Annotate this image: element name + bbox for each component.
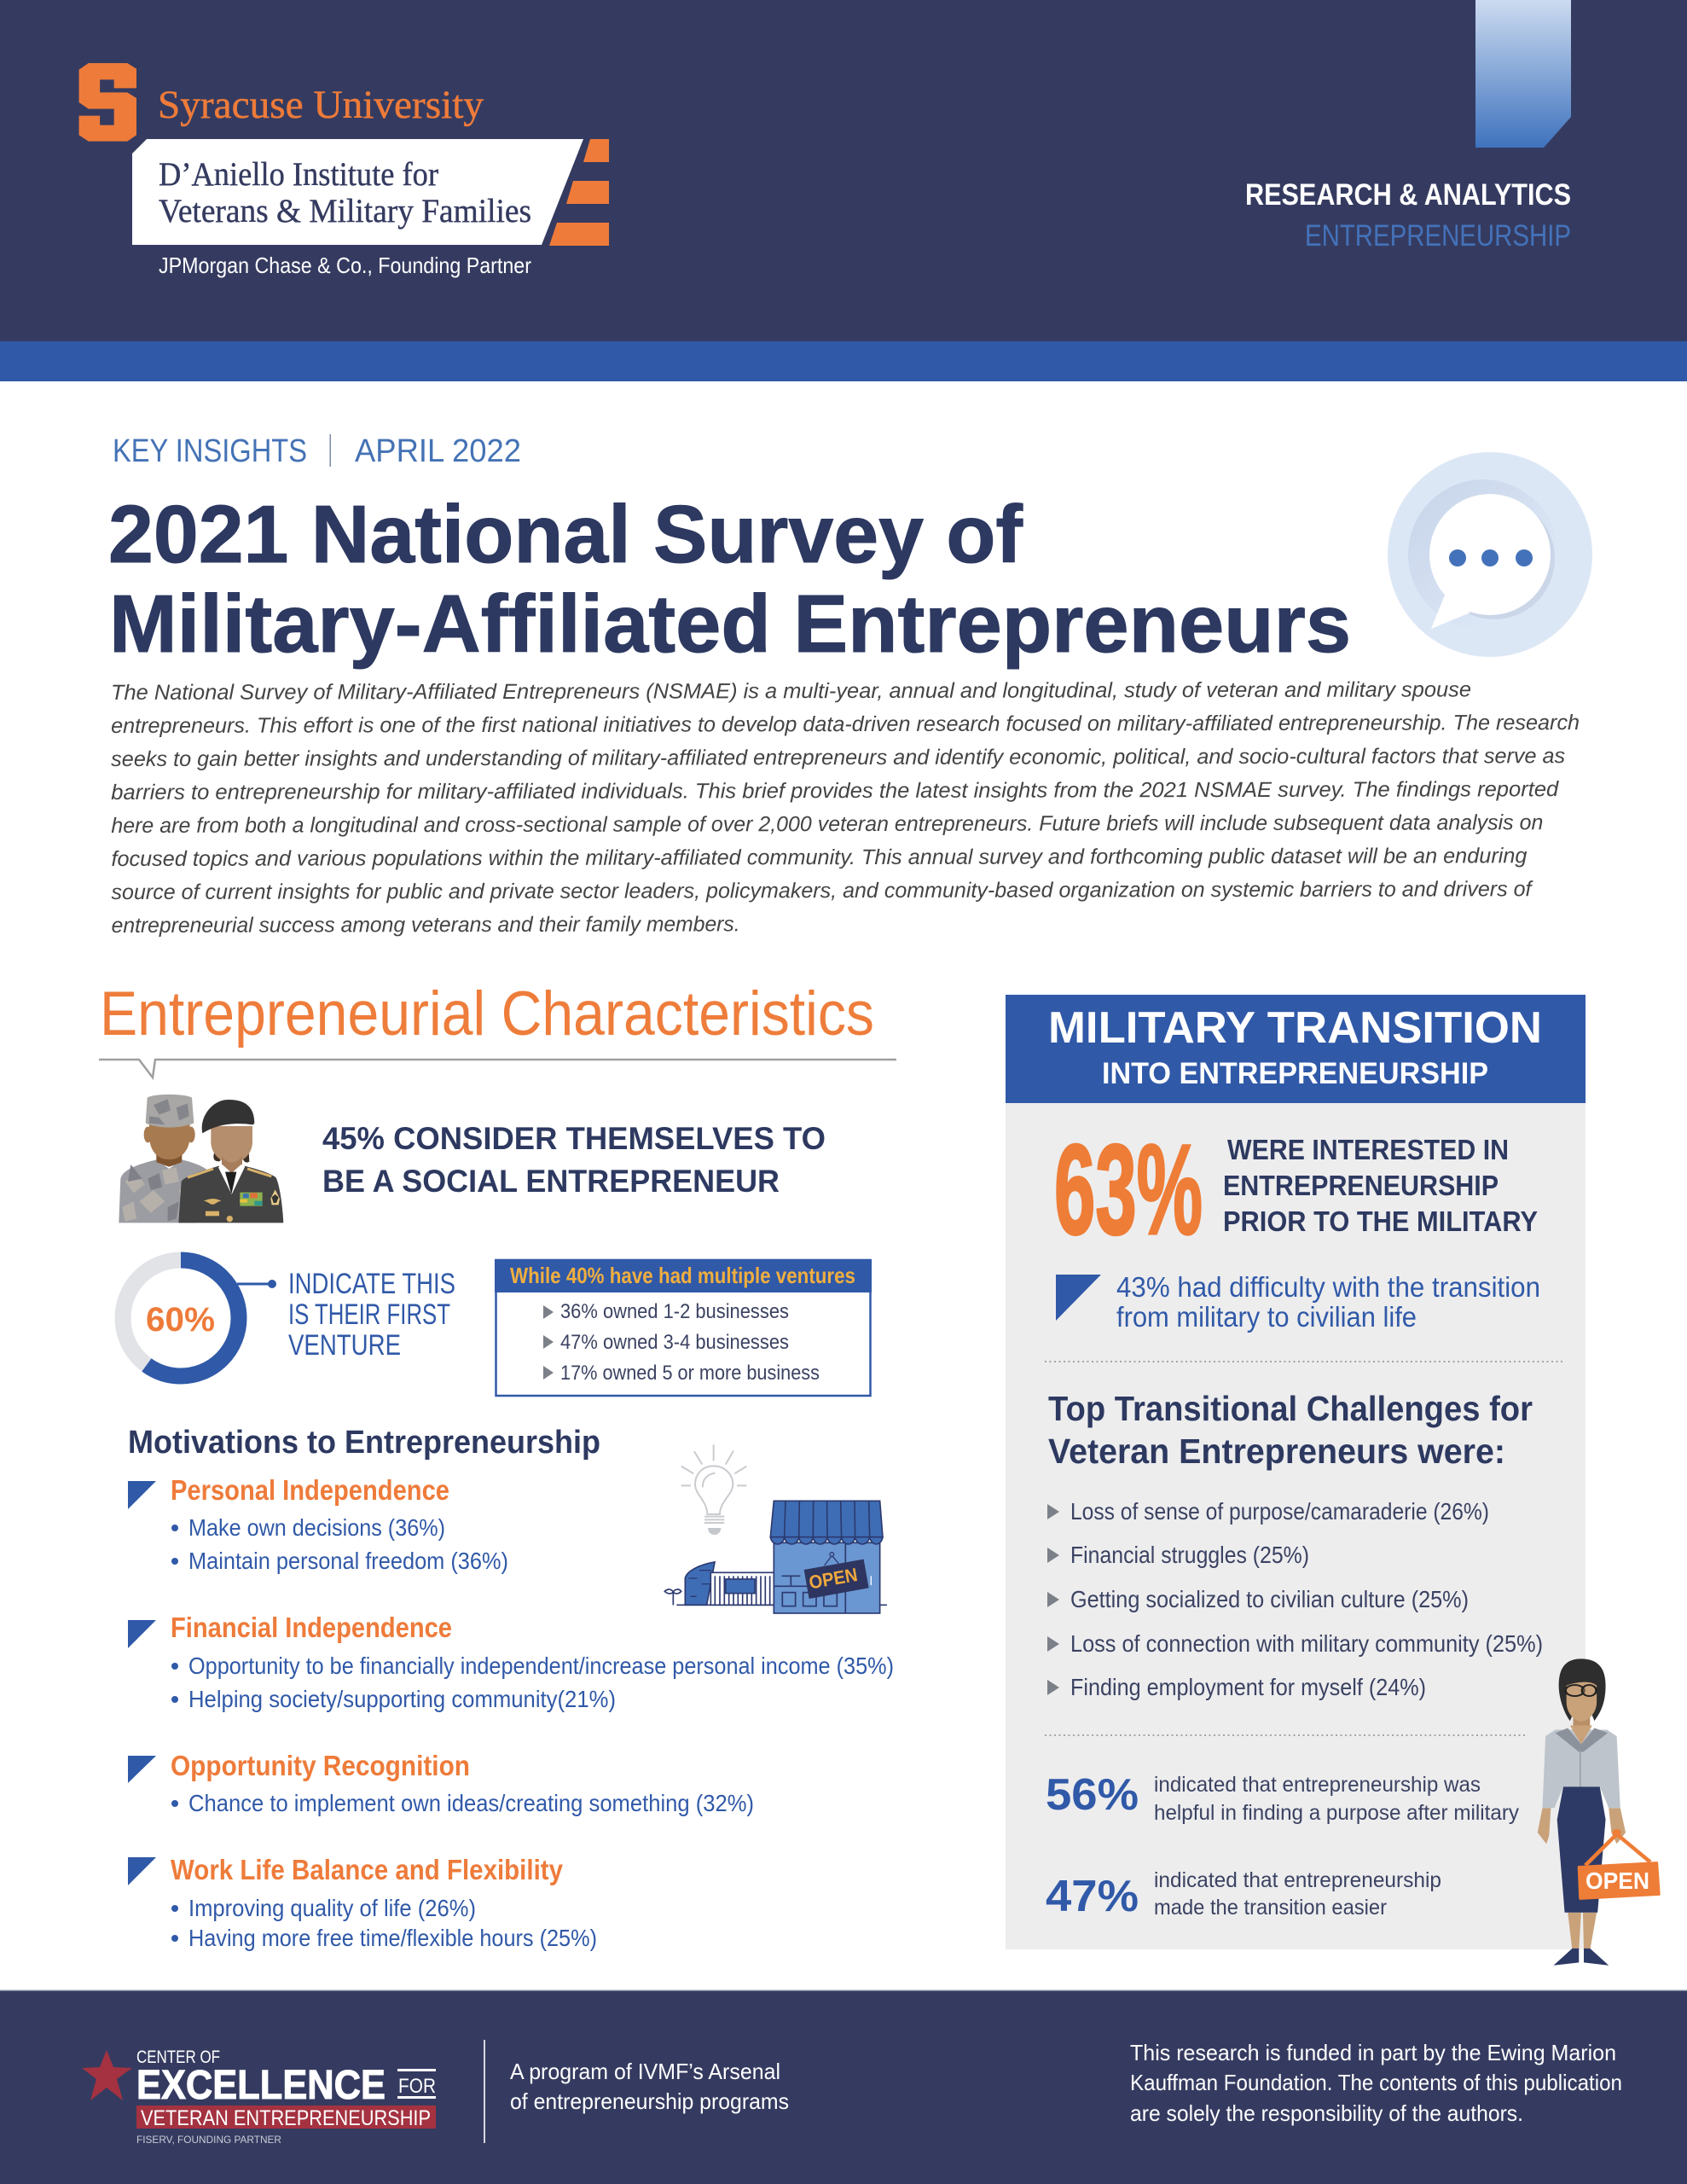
- motivation: personal independence: Maintain personal freedom (36%): [188, 1548, 508, 1574]
- first venture label: INDICATE THIS: [288, 1268, 455, 1300]
- key insights date line: APRIL 2022: [355, 433, 521, 469]
- panel background: [1006, 1103, 1586, 1949]
- icon: woman holding open sign: OPEN: [1586, 1867, 1649, 1894]
- multiple ventures box: 17% owned 5 or more business: [560, 1362, 820, 1385]
- stat: 47 percent: made the transition easier: [1154, 1896, 1387, 1920]
- center of excellence logo: [136, 2048, 436, 2146]
- icon: red star: [82, 2050, 132, 2100]
- institute logo box: Veterans & Military Families: [159, 193, 531, 229]
- stat description: ENTREPRENEURSHIP: [1223, 1170, 1499, 1201]
- icon: store front with open sign: [664, 1501, 887, 1613]
- header background: [0, 0, 1687, 341]
- funding statement: [1130, 2040, 1622, 2126]
- intro paragraph: entrepreneurial success among veterans and their family members.: [112, 912, 740, 938]
- center of excellence logo: VETERAN ENTREPRENEURSHIP: [141, 2106, 431, 2130]
- challenges heading: Veteran Entrepreneurs were:: [1048, 1432, 1505, 1471]
- arsenal program note: [510, 2059, 789, 2114]
- callout: 43 percent: from military to civilian life: [1116, 1301, 1417, 1333]
- motivation: personal independence: Personal Independence: [171, 1474, 449, 1506]
- icon: woman holding open sign: [1538, 1658, 1659, 1966]
- founding partner line: JPMorgan Chase & Co., Founding Partner: [159, 253, 531, 278]
- icon: light bulb: [681, 1444, 746, 1535]
- challenges list: Finding employment for myself (24%): [1070, 1674, 1426, 1700]
- first venture label: [288, 1268, 455, 1362]
- intro paragraph: focused topics and various populations within the military-affiliated community. This annual survey and forthcoming public dataset will be an enduring: [111, 844, 1528, 871]
- icon: two soldiers: [119, 1095, 283, 1223]
- challenges list: Financial struggles (25%): [1070, 1542, 1309, 1568]
- intro paragraph: [111, 677, 1580, 938]
- footer background: [0, 1990, 1687, 2184]
- stat: 56 percent: helpful in finding a purpose after military: [1154, 1801, 1519, 1825]
- intro paragraph: entrepreneurs. This effort is one of the first national initiatives to develop data-driven research focused on military-affiliated entrepreneurship. The research: [111, 711, 1580, 738]
- multiple ventures box: While 40% have had multiple ventures: [510, 1263, 855, 1288]
- stat: 47 percent: 47%: [1046, 1872, 1139, 1921]
- stat: 56 percent: [1046, 1770, 1519, 1825]
- motivation: financial independence: Opportunity to be financially independent/increase personal income (35%): [188, 1653, 894, 1679]
- challenges heading: Top Transitional Challenges for: [1048, 1389, 1533, 1428]
- motivation: work life balance: Improving quality of life (26%): [188, 1895, 476, 1921]
- icon: block S logo: [79, 63, 136, 142]
- statement: social entrepreneur: 45% CONSIDER THEMSELVES TO: [322, 1121, 826, 1156]
- statement: social entrepreneur: [322, 1121, 826, 1199]
- callout: 43 percent: [1056, 1271, 1540, 1333]
- panel: entrepreneurial characteristics: [99, 979, 896, 1951]
- motivation: opportunity recognition: [128, 1750, 754, 1816]
- icon: store front with open sign: OPEN: [808, 1564, 859, 1594]
- intro paragraph: The National Survey of Military-Affiliated Entrepreneurs (NSMAE) is a multi-year, annual and longitudinal, study of veteran and military spouse: [111, 677, 1471, 705]
- motivations heading: Motivations to Entrepreneurship: [128, 1425, 600, 1461]
- stat description: PRIOR TO THE MILITARY: [1223, 1205, 1538, 1237]
- panel: header: [0, 0, 1687, 381]
- heading underline with speech notch: [99, 1060, 896, 1077]
- motivation: opportunity recognition: Opportunity Recognition: [171, 1750, 470, 1781]
- arsenal program note: A program of IVMF’s Arsenal: [510, 2059, 780, 2084]
- institute logo box: D’Aniello Institute for: [159, 156, 438, 193]
- entrepreneurship label: ENTREPRENEURSHIP: [1305, 219, 1571, 253]
- institute logo box: [132, 139, 609, 246]
- challenges list: Loss of connection with military community (25%): [1070, 1630, 1543, 1657]
- section heading: Entrepreneurial Characteristics: [100, 979, 874, 1048]
- multiple ventures box: [495, 1259, 872, 1396]
- funding statement: are solely the responsibility of the authors.: [1130, 2100, 1523, 2126]
- motivation: personal independence: [128, 1474, 508, 1574]
- blue band: [0, 341, 1687, 381]
- funding statement: This research is funded in part by the Ewing Marion: [1130, 2040, 1616, 2065]
- panel: military transition: [1006, 995, 1586, 1949]
- motivation: personal independence: Make own decisions (36%): [188, 1514, 445, 1541]
- first venture label: IS THEIR FIRST: [288, 1298, 450, 1331]
- motivation: work life balance: Work Life Balance and Flexibility: [171, 1854, 564, 1885]
- challenges heading: [1048, 1389, 1533, 1471]
- icon: speech bubble: [1388, 452, 1592, 657]
- title: [108, 489, 1351, 670]
- motivation: financial independence: Financial Independence: [171, 1612, 452, 1643]
- stat description: WERE INTERESTED IN: [1227, 1134, 1509, 1165]
- multiple ventures box: 36% owned 1-2 businesses: [560, 1300, 789, 1323]
- intro paragraph: barriers to entrepreneurship for military-affiliated individuals. This brief provides the latest insights from the 2021 NSMAE survey. The findings reported: [111, 777, 1559, 804]
- callout: 43 percent: 43% had difficulty with the transition: [1116, 1271, 1540, 1303]
- panel: footer: [0, 1989, 1687, 2184]
- motivation: opportunity recognition: Chance to implement own ideas/creating something (32%): [188, 1790, 754, 1816]
- center of excellence logo: FISERV, FOUNDING PARTNER: [136, 2134, 281, 2146]
- research and analytics label: RESEARCH & ANALYTICS: [1245, 178, 1571, 212]
- center of excellence logo: CENTER OF: [136, 2048, 220, 2067]
- stat: 47 percent: indicated that entrepreneurship: [1154, 1868, 1441, 1892]
- stat description: [1223, 1134, 1538, 1237]
- stat: 56 percent: indicated that entrepreneurship was: [1154, 1773, 1481, 1797]
- motivation: financial independence: [128, 1612, 894, 1712]
- statement: social entrepreneur: BE A SOCIAL ENTREPRENEUR: [322, 1164, 780, 1199]
- funding statement: Kauffman Foundation. The contents of this publication: [1130, 2070, 1622, 2095]
- donut chart: 60 percent: [123, 1260, 276, 1376]
- motivation: work life balance: Having more free time/flexible hours (25%): [188, 1925, 597, 1951]
- big stat: 63 percent: 63%: [1054, 1118, 1203, 1261]
- intro paragraph: seeks to gain better insights and understanding of military-affiliated entrepreneurs and identify economic, political, and socio-cultural factors that serve as: [111, 744, 1565, 771]
- center of excellence logo: EXCELLENCE: [136, 2063, 386, 2108]
- intro paragraph: here are from both a longitudinal and cross-sectional sample of over 2,000 veteran entrepreneurs. Future briefs will include subsequent data analysis on: [111, 810, 1543, 838]
- key insights date line: KEY INSIGHTS: [113, 433, 307, 469]
- stat: 56 percent: 56%: [1046, 1770, 1139, 1820]
- multiple ventures box: 47% owned 3-4 businesses: [560, 1331, 789, 1354]
- challenges list: Loss of sense of purpose/camaraderie (26%): [1070, 1498, 1489, 1525]
- stat: 47 percent: [1046, 1868, 1441, 1921]
- intro paragraph: source of current insights for public and private sector leaders, policymakers, and community-based organization on systemic barriers to and drivers of: [111, 877, 1534, 904]
- arsenal program note: of entrepreneurship programs: [510, 2088, 789, 2114]
- title: 2021 National Survey of: [108, 489, 1023, 580]
- challenges list: Getting socialized to civilian culture (25%): [1070, 1586, 1469, 1612]
- panel header: MILITARY TRANSITION: [1048, 1003, 1542, 1053]
- donut chart: 60 percent: 60%: [146, 1301, 215, 1339]
- panel header: [1006, 995, 1586, 1103]
- motivation: work life balance: [128, 1854, 597, 1951]
- title: Military-Affiliated Entrepreneurs: [109, 578, 1351, 670]
- panel header: INTO ENTREPRENEURSHIP: [1102, 1057, 1488, 1090]
- first venture label: VENTURE: [288, 1329, 401, 1362]
- center of excellence logo: FOR: [398, 2075, 436, 2098]
- challenges list: [1047, 1498, 1543, 1700]
- motivation: financial independence: Helping society/supporting community(21%): [188, 1686, 616, 1712]
- key insights date line: [113, 433, 521, 469]
- ribbon bookmark: [1475, 0, 1571, 148]
- university name: Syracuse University: [158, 83, 484, 127]
